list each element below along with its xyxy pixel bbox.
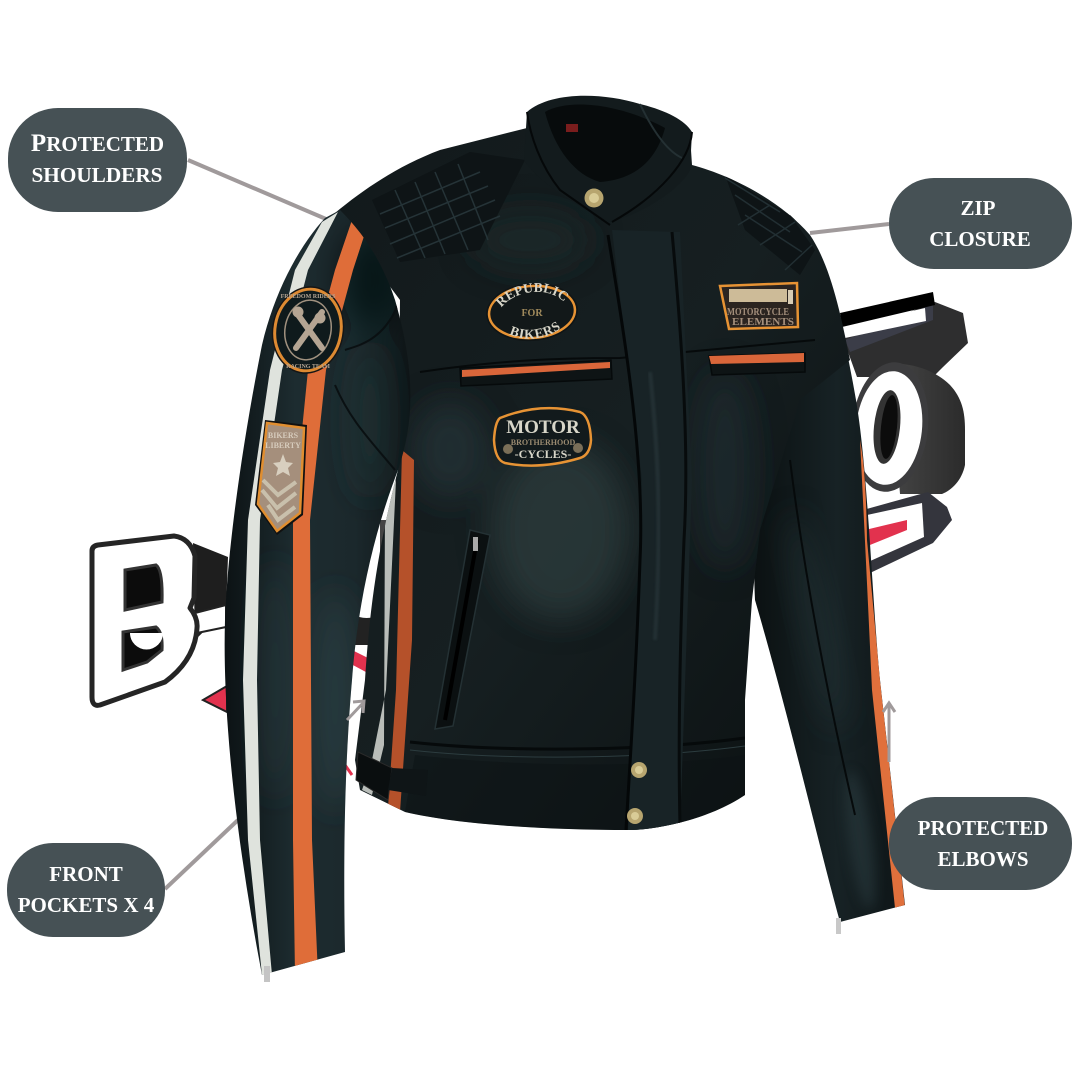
connector line: front pockets — [165, 820, 238, 889]
jacket left sleeve — [225, 210, 410, 982]
patch: republic for bikers — [486, 283, 578, 341]
right chest pocket — [709, 353, 805, 375]
callout: protected shoulders: PROTECTED — [31, 130, 164, 157]
callout: protected shoulders: SHOULDERS — [32, 163, 162, 187]
patch: crossed pistons: FREEDOM RIDERS — [281, 294, 336, 300]
background logo: letter O — [845, 358, 965, 496]
patch: motorcycle elements: ELEMENTS — [732, 317, 794, 328]
sleeve white stripe — [243, 212, 338, 975]
background logo: bottom right block — [863, 492, 952, 573]
patch: motor brotherhood cycles — [494, 408, 591, 466]
callout: zip closure: CLOSURE — [929, 227, 1031, 251]
patch: bikers liberty chevron: LIBERTY — [265, 441, 301, 450]
arrow: to front pocket — [347, 701, 364, 720]
left chest pocket — [460, 360, 612, 386]
leather highlights — [410, 210, 755, 620]
patch: crossed pistons — [265, 280, 351, 380]
callout: protected shoulders — [8, 108, 187, 212]
callout: protected elbows — [889, 797, 1072, 890]
patch: republic for bikers: REPUBLIC — [495, 283, 568, 308]
patch: motor brotherhood cycles: -CYCLES- — [515, 447, 571, 461]
hem snap buttons — [627, 762, 647, 824]
size label — [566, 124, 578, 132]
arrow: to protected elbow — [883, 703, 895, 762]
hem band — [410, 738, 745, 749]
collar snap button — [584, 188, 604, 208]
patch: bikers liberty chevron — [255, 420, 307, 535]
right shoulder quilting — [725, 175, 815, 275]
callout: zip closure — [889, 178, 1072, 269]
sleeve orange stripe — [293, 220, 367, 975]
patch: bikers liberty chevron: BIKERS — [268, 431, 299, 440]
left chest yoke seam — [420, 340, 815, 372]
background logo: letter U — [352, 520, 392, 645]
callout: protected elbows: PROTECTED — [918, 816, 1048, 840]
jacket body — [335, 128, 850, 830]
callout: front pockets x 4 — [7, 843, 165, 937]
callout: front pockets x 4: POCKETS X 4 — [18, 893, 155, 917]
patch: motor brotherhood cycles: BROTHERHOOD — [511, 438, 575, 447]
patch: republic for bikers: FOR — [521, 308, 543, 319]
hem strap — [356, 752, 428, 800]
patch: crossed pistons: RACING TEAM — [286, 364, 330, 370]
patch: motorcycle elements: MOTORCYCLE — [727, 306, 789, 318]
background logo: top right block — [840, 292, 968, 377]
callout: protected elbows: ELBOWS — [937, 847, 1029, 871]
background logo: red star fragments — [203, 650, 382, 775]
jacket right sleeve — [754, 215, 905, 934]
body white and orange stripes — [362, 480, 396, 795]
jacket collar — [524, 96, 692, 225]
left shoulder quilting — [456, 158, 511, 253]
callout: front pockets x 4: FRONT — [49, 862, 123, 886]
patch: motor brotherhood cycles: MOTOR — [506, 417, 580, 438]
connector line: protected shoulders — [188, 160, 326, 219]
patch: republic for bikers: BIKERS — [509, 322, 560, 339]
patch: motorcycle elements — [720, 283, 798, 329]
background logo: letter B and hyphen — [92, 536, 228, 705]
lower zip pocket — [435, 530, 490, 729]
callout: zip closure: ZIP — [960, 196, 996, 220]
connector line: zip closure — [810, 224, 889, 233]
central placket — [628, 351, 690, 830]
